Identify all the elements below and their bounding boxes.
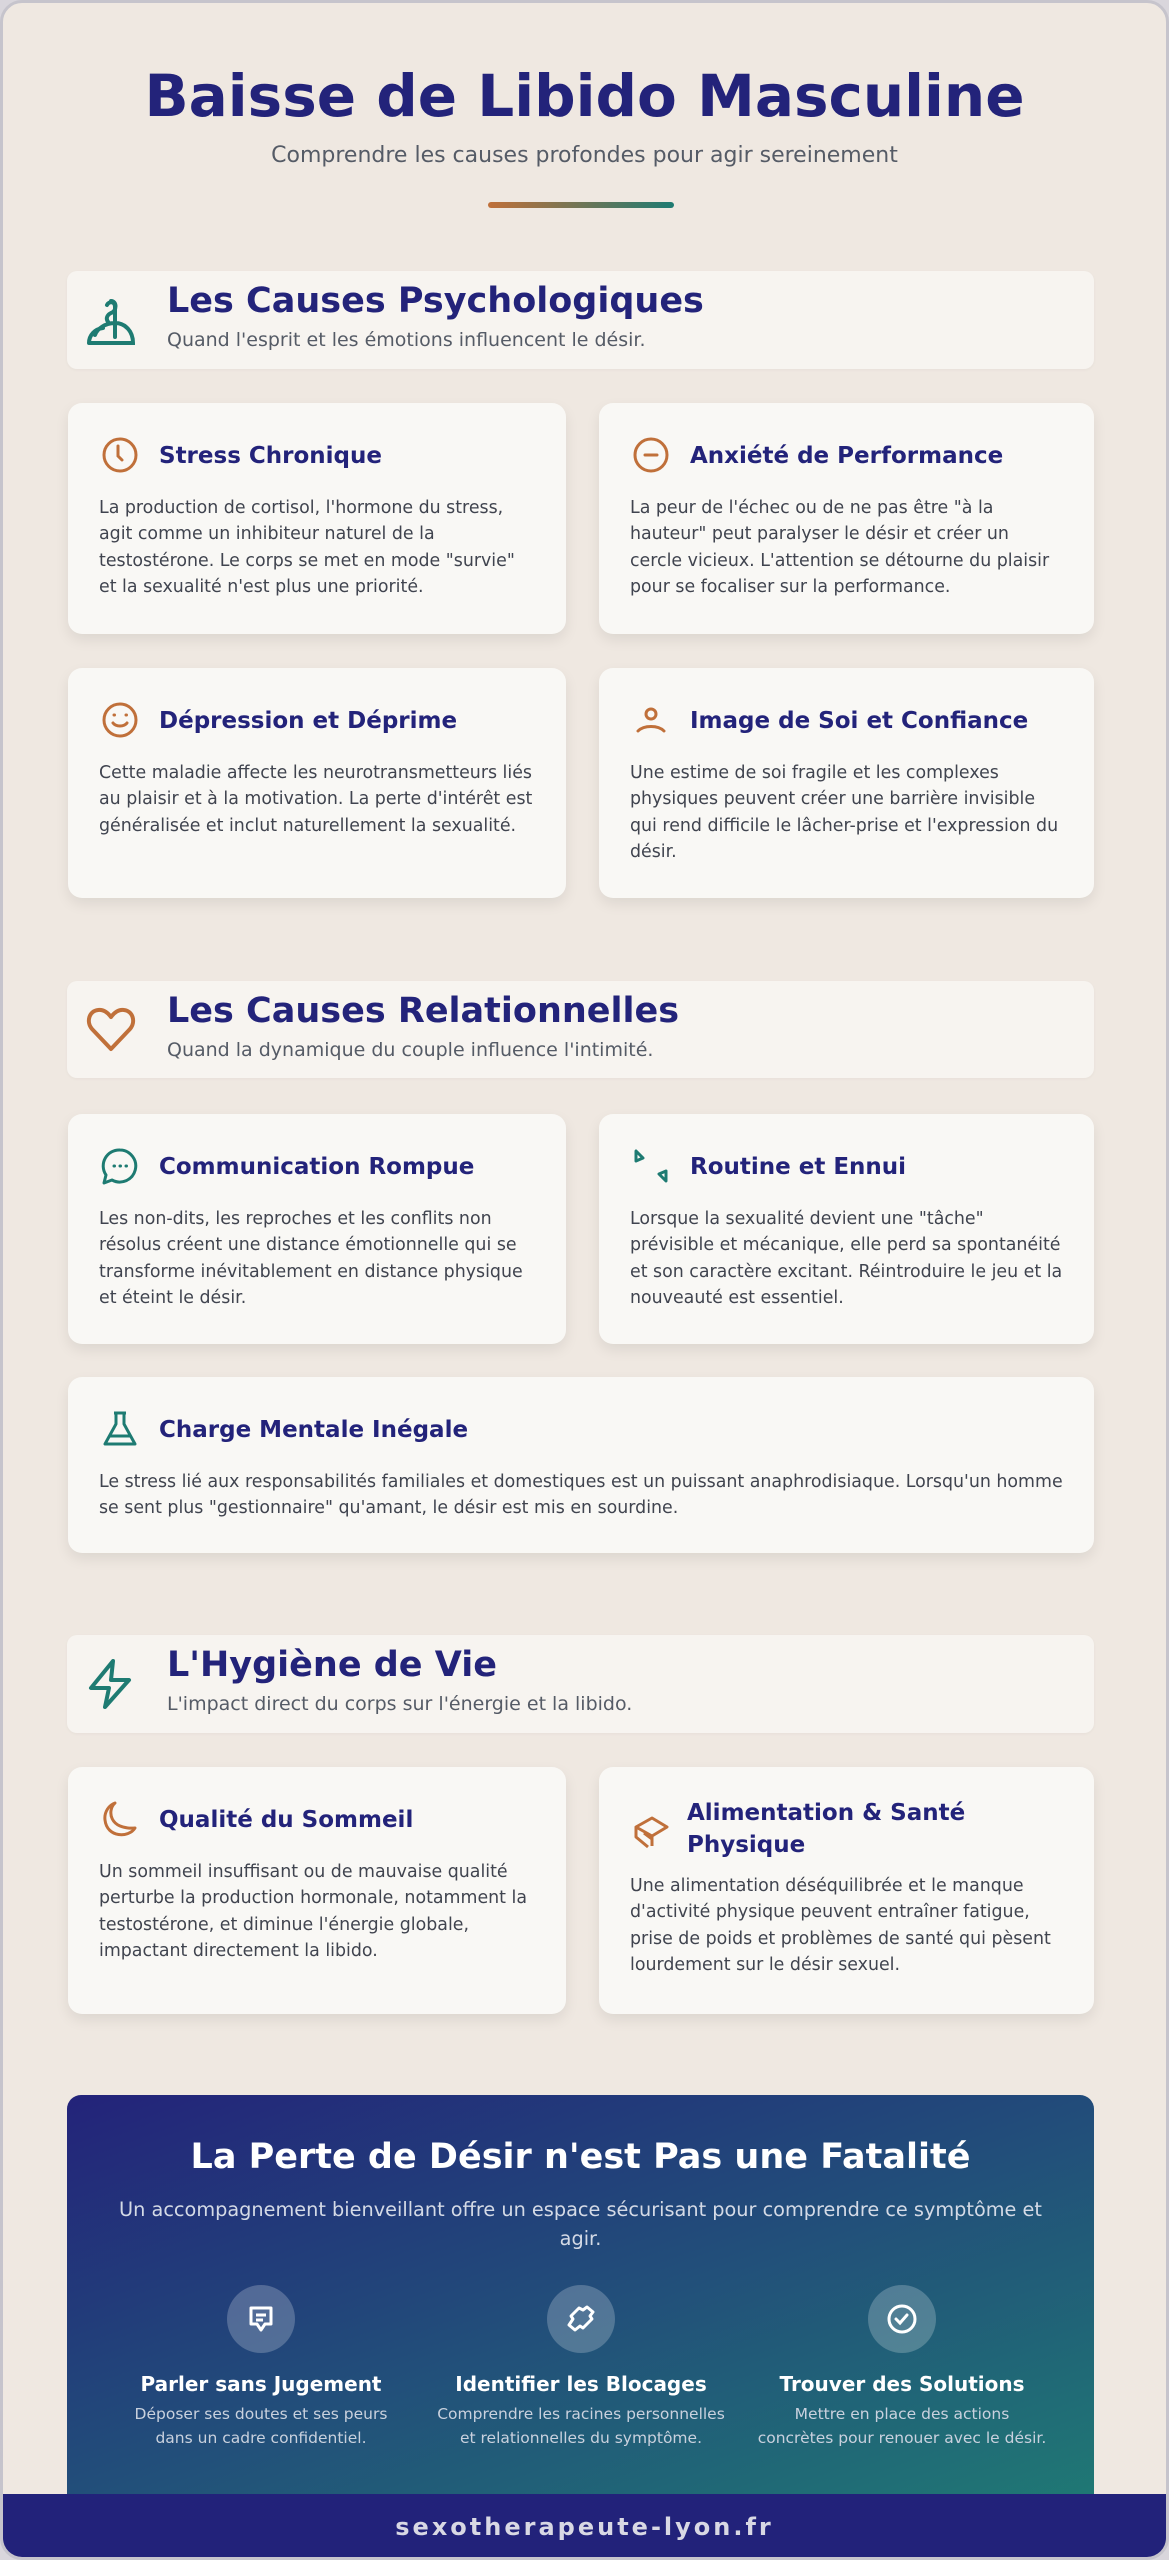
card: alimentation: Une alimentation déséquilibrée et le manque d'activité physique peuvent entraîner fatigue, prise de poids et problèmes de santé qui pèsent lourdement sur le désir sexuel. [630,1876,1051,1975]
card: anxiete: La peur de l'échec ou de ne pas être "à la hauteur" peut paralyser le désir et créer un cercle vicieux. L'attention se détourne du plaisir pour se focaliser sur la performance. [630,498,1049,597]
cta subtitle: Un accompagnement bienveillant offre un espace sécurisant pour comprendre ce symptôme et agir. [119,2198,1042,2250]
icon: user [636,708,666,733]
card: depression [68,668,566,898]
step: parler: dans un cadre confidentiel. [155,2429,367,2447]
card: sommeil: Qualité du Sommeil [159,1807,413,1833]
card: depression: Dépression et Déprime [159,708,457,734]
icon: check circle [868,2285,936,2353]
icon: heart [86,1008,136,1052]
section header: psychologiques [67,271,1094,369]
card: communication [68,1114,566,1344]
icon: chat [102,1148,138,1184]
card: stress chronique [68,403,566,634]
card: image de soi [599,668,1094,898]
card: charge mentale: Charge Mentale Inégale [159,1417,468,1443]
card: sommeil: Un sommeil insuffisant ou de mauvaise qualité perturbe la production hormonale, notamment la testostérone, et diminue l'énergie globale, impactant directement la libido. [99,1862,527,1961]
card: anxiete [599,403,1094,634]
step: parler: Déposer ses doutes et ses peurs [135,2405,387,2423]
icon: flask [103,1412,136,1446]
section header: hygiene: L'Hygiène de Vie [167,1645,497,1685]
step: solutions: Mettre en place des actions [795,2405,1009,2423]
step: identifier: et relationnelles du symptôme. [460,2429,702,2447]
title: Baisse de Libido Masculine [144,62,1025,130]
step: parler [135,2285,387,2447]
gradient divider [488,202,674,208]
card: routine: Lorsque la sexualité devient une "tâche" prévisible et mécanique, elle perd sa spontanéité et son caractère excitant. Réintroduire le jeu et la nouveauté est essentiel. [630,1209,1062,1308]
icon: arrows [634,1149,668,1183]
card: stress chronique: La production de cortisol, l'hormone du stress, agit comme un inhibiteur naturel de la testostérone. Le corps se met en mode "survie" et la sexualité n'est plus une priorité. [99,498,515,597]
card: alimentation: Physique [687,1832,805,1858]
card: alimentation: Alimentation & Santé [687,1800,965,1826]
section header: relationnelles: Quand la dynamique du couple influence l'intimité. [167,1039,653,1061]
icon: lightning [88,1659,132,1709]
card: stress chronique: Stress Chronique [159,443,382,469]
section header: hygiene: L'impact direct du corps sur l'énergie et la libido. [167,1693,632,1715]
icon: clock [102,438,138,472]
step: solutions: concrètes pour renouer avec le désir. [758,2429,1046,2447]
card: sommeil [68,1767,566,2014]
card: routine [599,1114,1094,1344]
card: alimentation [599,1767,1094,2014]
card: communication: Communication Rompue [159,1154,474,1180]
card: image de soi: Image de Soi et Confiance [690,708,1028,734]
section header: relationnelles [67,981,1094,1078]
cta panel [67,2095,1094,2515]
card: image de soi: Une estime de soi fragile et les complexes physiques peuvent créer une barrière invisible qui rend difficile le lâcher-prise et l'expression du désir. [630,763,1058,862]
card: depression: Cette maladie affecte les neurotransmetteurs liés au plaisir et à la motivation. La perte d'intérêt est généralisée et inclut naturellement la sexualité. [99,763,532,836]
step: solutions [758,2285,1046,2447]
icon: head [87,299,135,345]
card: anxiete: Anxiété de Performance [690,443,1003,469]
step: identifier: Identifier les Blocages [455,2372,707,2396]
step: solutions: Trouver des Solutions [780,2372,1024,2396]
icon: minus circle [634,438,668,472]
icon: smile [102,702,138,738]
section header: hygiene [67,1635,1094,1733]
section header: psychologiques: Les Causes Psychologiques [167,281,704,321]
step: parler: Parler sans Jugement [140,2372,382,2396]
card: charge mentale: Le stress lié aux responsabilités familiales et domestiques est un puissant anaphrodisiaque. Lorsqu'un homme se sent plus "gestionnaire" qu'amant, le désir est mis en sourdine. [99,1472,1063,1518]
card: charge mentale [68,1377,1094,1553]
subtitle: Comprendre les causes profondes pour agir sereinement [271,143,898,168]
icon: puzzle [547,2285,615,2353]
icon: message [227,2285,295,2353]
step: identifier [437,2285,725,2447]
step: identifier: Comprendre les racines personnelles [437,2405,725,2423]
section header: relationnelles: Les Causes Relationnelles [167,991,679,1031]
icon: moon [103,1802,136,1836]
cta title: La Perte de Désir n'est Pas une Fatalité [191,2137,970,2177]
section header: psychologiques: Quand l'esprit et les émotions influencent le désir. [167,329,646,351]
icon: box [634,1816,669,1848]
card: routine: Routine et Ennui [690,1154,906,1180]
footer: sexotherapeute-lyon.fr [395,2513,774,2541]
footer [3,2494,1166,2560]
card: communication: Les non-dits, les reproches et les conflits non résolus créent une distance émotionnelle qui se transforme inévitablement en distance physique et éteint le désir. [99,1209,523,1308]
